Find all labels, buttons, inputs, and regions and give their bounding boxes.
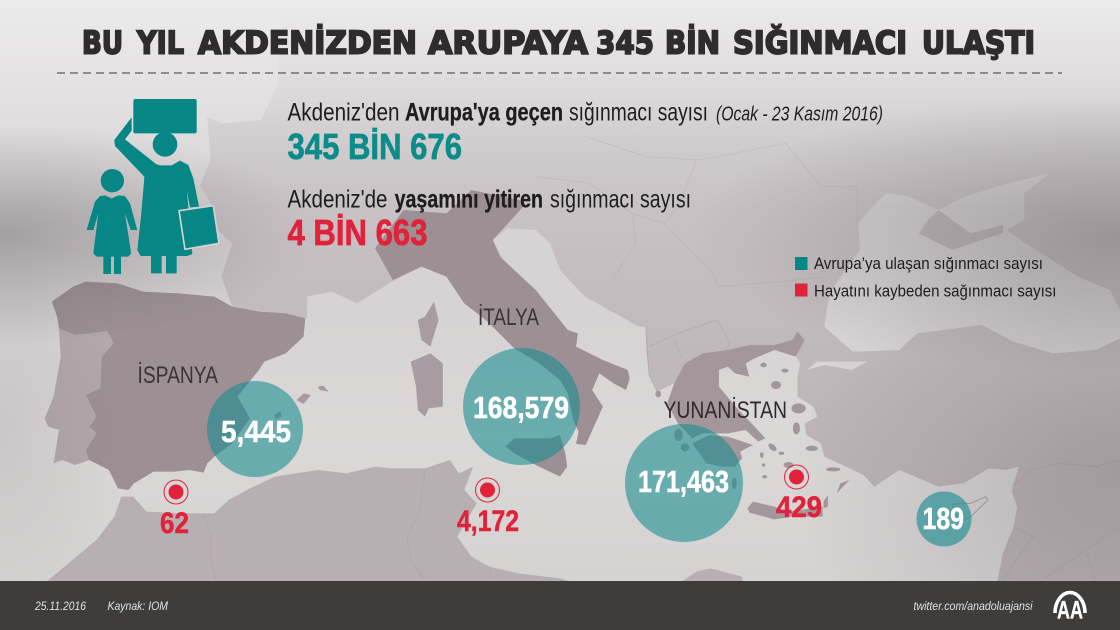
title: AKDENİZDEN: [198, 26, 417, 62]
sea: Black Sea: [824, 173, 1120, 353]
legend: Hayatını kaybeden sağınmacı sayısı: [814, 282, 1056, 301]
footer: source: Kaynak: IOM: [108, 601, 168, 613]
land: Spain: [52, 282, 305, 490]
icon: child head: [101, 169, 124, 192]
text block: crossed to Europe: sığınmacı sayısı: [569, 98, 708, 126]
text block: lives lost: Akdeniz'de: [288, 186, 388, 214]
bubble: Italy arrivals: [463, 348, 580, 465]
title: [82, 25, 1035, 62]
legend: Avrupa’ya ulaşan sığınmacı sayısı: [814, 254, 1043, 273]
bubble: Spain arrivals: [207, 381, 303, 477]
marker: Spain deaths: 62: [160, 507, 189, 540]
icon: box on head: [133, 99, 197, 133]
bubble: Greece arrivals: [625, 424, 743, 542]
bubble: Spain arrivals: 5,445: [221, 414, 291, 449]
title: ULAŞTI: [922, 26, 1035, 62]
label: İspanya: İSPANYA: [138, 362, 218, 389]
footer: [0, 581, 1120, 630]
icon: child body: [87, 195, 137, 274]
title: BİN: [665, 26, 720, 62]
footer: date: 25.11.2016: [34, 601, 87, 613]
land: Aegean islands: [655, 363, 849, 508]
land: Sicily: [505, 435, 567, 477]
text block: crossed to Europe: Avrupa'ya geçen: [405, 98, 563, 126]
text block: lives lost: 4 BİN 663: [288, 212, 428, 253]
title: BU: [82, 26, 123, 62]
title: 345: [596, 26, 654, 62]
title: YIL: [136, 26, 184, 62]
marker: Spain deaths: [160, 480, 189, 540]
marker: Italy deaths: 4,172: [457, 505, 519, 538]
icon: raised arm: [114, 117, 156, 177]
European borders: [536, 137, 857, 287]
icon: mother head: [153, 132, 177, 157]
land: Sardinia and Corsica: [411, 302, 443, 417]
label: İtalya: İTALYA: [478, 304, 539, 331]
land: Peloponnese: [692, 435, 753, 467]
text block: crossed to Europe: (Ocak - 23 Kasım 2016): [716, 104, 883, 126]
text block: crossed to Europe: Akdeniz'den: [288, 98, 400, 126]
bubble: Cyprus arrivals: 189: [922, 501, 964, 536]
land: Portugal: [45, 328, 114, 465]
text block: lives lost: yaşamını yitiren: [395, 186, 543, 214]
bubble: Cyprus arrivals: [916, 492, 972, 546]
bubble: Greece arrivals: 171,463: [638, 464, 729, 499]
text block: crossed to Europe: [288, 98, 883, 167]
land: Greece mainland: [667, 332, 805, 442]
text block: lives lost: sığınmacı sayısı: [550, 186, 691, 214]
icon: suitcase: [179, 206, 219, 249]
legend: [795, 254, 1056, 301]
label: Yunanistan: YUNANİSTAN: [664, 397, 787, 424]
land: Libya coast: [681, 568, 743, 582]
land: Balearic islands: [274, 386, 329, 419]
marker: Italy deaths: [457, 478, 519, 538]
marker: Greece deaths: 429: [776, 491, 822, 524]
text block: lives lost: [288, 186, 691, 253]
land: North Africa: [46, 460, 571, 582]
outline: Cyprus: [953, 497, 988, 520]
sea: Marmara: [806, 362, 867, 370]
land: Crete: [748, 502, 823, 519]
land: Crimea: [919, 210, 1003, 250]
title: SIĞINMACI: [733, 25, 907, 62]
marker: Greece deaths: [776, 465, 822, 524]
text block: crossed to Europe: 345 BİN 676: [288, 126, 462, 167]
title: ARUPAYA: [428, 26, 588, 62]
borders: [646, 320, 1120, 580]
logo: Anadolu Agency: AA: [1057, 596, 1083, 624]
icon: mother body: [137, 161, 199, 273]
icon: refugee mother and child: [87, 99, 219, 274]
African borders: [204, 470, 491, 580]
logo: Anadolu Agency: [1055, 592, 1085, 624]
footer: twitter: twitter.com/anadoluajansi: [914, 601, 1033, 613]
bubble: Italy arrivals: 168,579: [473, 390, 569, 425]
land: Italy: [375, 190, 630, 445]
